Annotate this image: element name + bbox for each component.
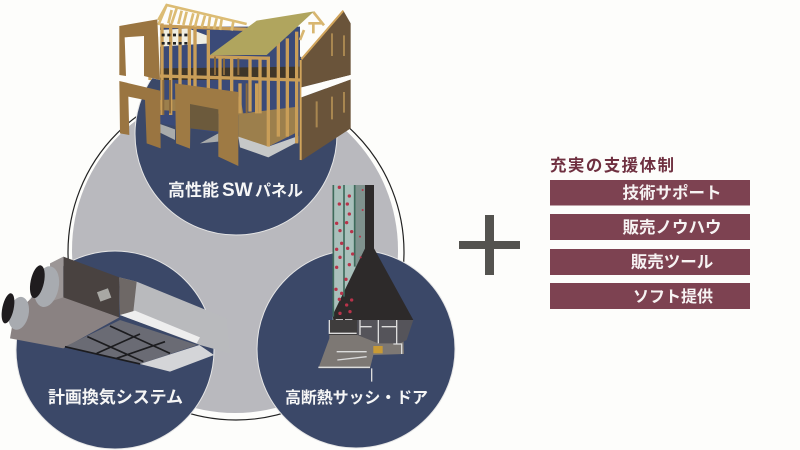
panel: planned ventilation system circle xyxy=(0,251,230,449)
heading: support system: 充実の支援体制 xyxy=(550,155,674,175)
label: high-performance SW panel: SW xyxy=(222,180,253,201)
panel: high-insulation sash and door circle xyxy=(257,185,455,448)
icon: window sash cross-section xyxy=(318,185,413,382)
bar: software provision: ソフト提供 xyxy=(633,288,713,306)
label: high-insulation sash and door: 高断熱サッシ・ドア xyxy=(285,388,428,407)
bar: sales tools xyxy=(550,249,750,275)
bar: software provision xyxy=(550,283,750,309)
large gray circle with black outline xyxy=(68,84,404,420)
icon: plus sign xyxy=(459,215,520,275)
panel: high-performance SW panel circle xyxy=(119,5,351,235)
bar: sales tools: 販売ツール xyxy=(631,252,713,272)
bar: sales know-how: 販売ノウハウ xyxy=(622,218,722,237)
icon: timber-frame house xyxy=(119,5,351,166)
bar: technical support xyxy=(550,180,750,206)
icon: ventilation unit xyxy=(0,257,230,372)
bar: sales know-how xyxy=(550,214,750,240)
label: high-performance SW panel: 高性能 xyxy=(168,180,219,200)
label: high-performance SW panel: パネル xyxy=(255,182,303,200)
label: planned ventilation system: 計画換気システム xyxy=(48,388,183,407)
panel: support system list xyxy=(550,155,750,309)
bar: technical support: 技術サポート xyxy=(622,182,722,202)
